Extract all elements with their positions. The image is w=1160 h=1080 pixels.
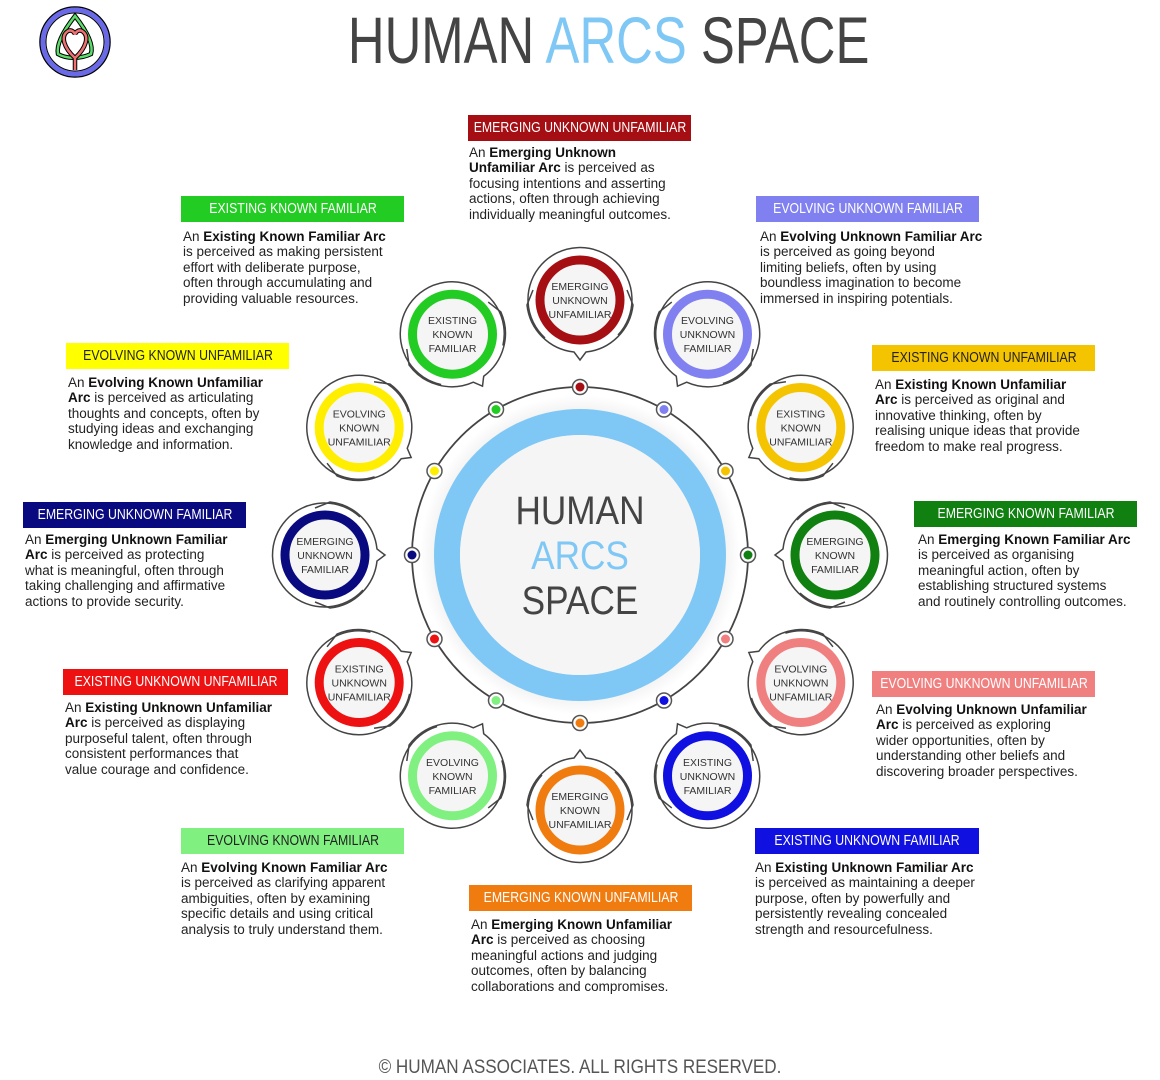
node: existing known familiar: EXISTING [428, 315, 477, 327]
node: emerging unknown unfamiliar [527, 248, 633, 360]
panel: evolving known unfamiliar [66, 343, 289, 452]
panel: emerging known familiar: establishing structured systems [918, 578, 1106, 593]
node: existing unknown unfamiliar: UNFAMILIAR [328, 692, 391, 704]
panel: evolving known unfamiliar: EVOLVING KNOWN UNFAMILIAR [83, 347, 272, 364]
panel: existing unknown familiar: An Existing Unknown Familiar Arc [755, 860, 974, 875]
panel: emerging known familiar: is perceived as organising [918, 547, 1074, 562]
node: emerging known unfamiliar [527, 750, 633, 862]
title: HUMAN ARCS SPACE [348, 3, 869, 77]
node: evolving known familiar [380, 697, 528, 848]
panel: emerging unknown unfamiliar: actions, often through achieving [469, 191, 660, 206]
panel: evolving known unfamiliar: An Evolving Known Unfamiliar [68, 375, 263, 390]
node: emerging unknown familiar [273, 502, 385, 608]
node: emerging unknown familiar: EMERGING [296, 536, 354, 548]
panel: existing unknown unfamiliar: An Existing Unknown Unfamiliar [65, 700, 272, 715]
panel: evolving known familiar: ambiguities, often by examining [181, 891, 370, 906]
center hub: HUMAN [515, 488, 645, 532]
panel: evolving unknown familiar: is perceived as going beyond [760, 244, 935, 259]
node: existing unknown familiar: FAMILIAR [684, 785, 732, 797]
node: evolving unknown familiar: FAMILIAR [684, 343, 732, 355]
panel: existing known familiar: EXISTING KNOWN FAMILIAR [209, 200, 376, 217]
connector dots [404, 380, 756, 730]
panel: emerging known familiar [914, 501, 1137, 609]
node: evolving known familiar: EVOLVING [426, 757, 479, 769]
panel: emerging unknown familiar: EMERGING UNKNOWN FAMILIAR [37, 506, 232, 523]
node: emerging unknown familiar: UNKNOWN [297, 550, 353, 562]
node: evolving known unfamiliar: EVOLVING [333, 408, 386, 420]
panel: emerging known familiar: and routinely controlling outcomes. [918, 594, 1127, 609]
panel: emerging unknown unfamiliar: focusing intentions and asserting [469, 176, 666, 191]
panel: existing unknown unfamiliar: value courage and confidence. [65, 762, 249, 777]
panel: emerging unknown unfamiliar: EMERGING UNKNOWN UNFAMILIAR [473, 119, 686, 136]
node: evolving unknown familiar [632, 262, 780, 413]
node: evolving unknown unfamiliar [722, 607, 873, 755]
panel: emerging known unfamiliar [469, 885, 692, 994]
node: emerging unknown unfamiliar: EMERGING [551, 281, 609, 293]
panel: emerging known familiar: An Emerging Known Familiar Arc [918, 532, 1131, 547]
panel: existing unknown familiar [755, 828, 979, 937]
panel: existing known familiar: effort with deliberate purpose, [183, 260, 361, 275]
panel: existing known unfamiliar: realising unique ideas that provide [875, 423, 1080, 438]
node: emerging unknown unfamiliar: UNFAMILIAR [548, 309, 612, 321]
node: emerging known familiar: FAMILIAR [811, 564, 859, 576]
panel: existing unknown familiar: is perceived as maintaining a deeper [755, 875, 975, 890]
panel: evolving known unfamiliar: studying ideas and exchanging [68, 421, 253, 436]
node: existing unknown familiar [632, 697, 780, 848]
node: evolving unknown familiar: UNKNOWN [680, 329, 735, 341]
node: emerging unknown familiar: FAMILIAR [301, 564, 349, 576]
panel: existing known familiar: is perceived as making persistent [183, 244, 383, 259]
panel: evolving unknown familiar: An Evolving Unknown Familiar Arc [760, 229, 982, 244]
panel: emerging known unfamiliar: Arc is perceived as choosing [471, 932, 645, 947]
panel: existing unknown familiar: EXISTING UNKNOWN FAMILIAR [774, 832, 960, 849]
node: existing known unfamiliar: EXISTING [776, 408, 825, 420]
logo [39, 6, 111, 78]
panel: evolving unknown unfamiliar: An Evolving Unknown Unfamiliar [876, 702, 1087, 717]
panel: evolving known unfamiliar: thoughts and concepts, often by [68, 406, 259, 421]
node: existing unknown familiar: UNKNOWN [680, 771, 735, 783]
panel: evolving unknown unfamiliar: understanding other beliefs and [876, 748, 1065, 763]
panel: emerging known unfamiliar: An Emerging Known Unfamiliar [471, 917, 672, 932]
panel: existing known familiar: often through accumulating and [183, 275, 372, 290]
node: existing unknown unfamiliar: UNKNOWN [331, 678, 387, 690]
panel: existing unknown unfamiliar: purposeful talent, often through [65, 731, 252, 746]
node: emerging known familiar [775, 502, 887, 608]
panel: evolving known familiar: specific details and using critical [181, 906, 373, 921]
panel: existing known familiar [181, 196, 404, 306]
panel: evolving known familiar: analysis to truly understand them. [181, 922, 383, 937]
footer: © HUMAN ASSOCIATES. ALL RIGHTS RESERVED. [379, 1057, 781, 1078]
node: emerging unknown unfamiliar: UNKNOWN [552, 295, 608, 307]
panel: evolving unknown familiar: boundless imagination to become [760, 275, 961, 290]
node: evolving known familiar: FAMILIAR [429, 785, 477, 797]
node: evolving known unfamiliar: UNFAMILIAR [328, 436, 391, 448]
node: emerging known familiar: KNOWN [815, 550, 855, 562]
panel: existing known unfamiliar [872, 345, 1095, 454]
panel: emerging unknown familiar [23, 502, 246, 609]
panel: evolving unknown familiar: EVOLVING UNKNOWN FAMILIAR [773, 200, 962, 217]
panel: evolving unknown unfamiliar [872, 671, 1095, 779]
node: existing unknown familiar: EXISTING [683, 757, 732, 769]
panel: emerging known familiar: meaningful action, often by [918, 563, 1079, 578]
panel: existing unknown unfamiliar: Arc is perceived as displaying [65, 715, 245, 730]
panel: evolving unknown familiar: immersed in inspiring potentials. [760, 291, 953, 306]
panel: emerging unknown familiar: what is meaningful, often through [25, 563, 224, 578]
panel: emerging known unfamiliar: meaningful actions and judging [471, 948, 657, 963]
panel: evolving known familiar: is perceived as clarifying apparent [181, 875, 385, 890]
node: existing known familiar: FAMILIAR [429, 343, 477, 355]
panel: emerging unknown unfamiliar [468, 115, 691, 222]
panel: existing unknown familiar: purpose, often by powerfully and [755, 891, 950, 906]
panel: existing known unfamiliar: innovative thinking, often by [875, 408, 1042, 423]
panel: existing known unfamiliar: EXISTING KNOWN UNFAMILIAR [891, 349, 1076, 366]
node: existing unknown unfamiliar: EXISTING [335, 664, 384, 676]
node: existing known familiar [380, 262, 528, 413]
panel: existing known unfamiliar: Arc is perceived as original and [875, 392, 1065, 407]
node: existing unknown unfamiliar [287, 607, 438, 755]
panel: evolving known familiar: An Evolving Known Familiar Arc [181, 860, 388, 875]
panel: evolving known familiar [181, 828, 404, 937]
node: existing known unfamiliar: UNFAMILIAR [769, 436, 833, 448]
panel: evolving known familiar: EVOLVING KNOWN FAMILIAR [206, 832, 379, 849]
panel: evolving unknown familiar: limiting beliefs, often by using [760, 260, 936, 275]
panel: existing unknown familiar: persistently revealing concealed [755, 906, 947, 921]
panel: existing unknown unfamiliar [63, 669, 288, 777]
panel: existing unknown familiar: strength and resourcefulness. [755, 922, 933, 937]
node: evolving known unfamiliar: KNOWN [339, 422, 379, 434]
panel: emerging unknown unfamiliar: Unfamiliar Arc is perceived as [469, 160, 655, 175]
node: evolving unknown unfamiliar: UNFAMILIAR [769, 692, 833, 704]
panel: evolving unknown unfamiliar: Arc is perceived as exploring [876, 717, 1051, 732]
panel: existing known familiar: providing valuable resources. [183, 291, 359, 306]
panel: existing known unfamiliar: freedom to make real progress. [875, 439, 1063, 454]
panel: emerging unknown unfamiliar: An Emerging Unknown [469, 145, 616, 160]
panel: emerging known unfamiliar: EMERGING KNOWN UNFAMILIAR [483, 889, 678, 906]
node: evolving unknown unfamiliar: EVOLVING [774, 664, 827, 676]
node: existing known familiar: KNOWN [432, 329, 473, 341]
node: emerging known unfamiliar: UNFAMILIAR [548, 819, 612, 831]
node: emerging known unfamiliar: EMERGING [551, 791, 609, 803]
panel: emerging known familiar: EMERGING KNOWN FAMILIAR [937, 505, 1114, 522]
panel: emerging unknown familiar: An Emerging Unknown Familiar [25, 532, 228, 547]
panel: evolving unknown unfamiliar: discovering broader perspectives. [876, 764, 1078, 779]
panel: emerging known unfamiliar: outcomes, often by balancing [471, 963, 647, 978]
panel: evolving known unfamiliar: Arc is perceived as articulating [68, 390, 253, 405]
panel: existing known familiar: An Existing Known Familiar Arc [183, 229, 386, 244]
panel: existing unknown unfamiliar: EXISTING UNKNOWN UNFAMILIAR [74, 673, 277, 690]
node: evolving unknown familiar: EVOLVING [681, 315, 734, 327]
node: existing known unfamiliar: KNOWN [781, 422, 821, 434]
node: evolving known familiar: KNOWN [432, 771, 473, 783]
panel: evolving known unfamiliar: knowledge and information. [68, 437, 233, 452]
panel: emerging unknown unfamiliar: individually meaningful outcomes. [469, 207, 671, 222]
panel: existing known unfamiliar: An Existing Known Unfamiliar [875, 377, 1066, 392]
panel: emerging unknown familiar: Arc is perceived as protecting [25, 547, 204, 562]
panel: existing unknown unfamiliar: consistent performances that [65, 746, 238, 761]
node: emerging known familiar: EMERGING [806, 536, 864, 548]
panel: emerging unknown familiar: actions to provide security. [25, 594, 184, 609]
panel: emerging unknown familiar: taking challenging and affirmative [25, 578, 225, 593]
center hub [447, 422, 713, 688]
panel: evolving unknown familiar [756, 196, 982, 306]
node: evolving unknown unfamiliar: UNKNOWN [773, 678, 829, 690]
node: emerging known unfamiliar: KNOWN [560, 805, 600, 817]
node: evolving known unfamiliar [287, 355, 438, 503]
panel: evolving unknown unfamiliar: EVOLVING UNKNOWN UNFAMILIAR [880, 675, 1087, 692]
node: existing known unfamiliar [722, 355, 873, 503]
center hub: ARCS [531, 533, 629, 577]
panel: emerging known unfamiliar: collaborations and compromises. [471, 979, 668, 994]
panel: evolving unknown unfamiliar: wider opportunities, often by [876, 733, 1045, 748]
center hub: SPACE [522, 578, 638, 622]
